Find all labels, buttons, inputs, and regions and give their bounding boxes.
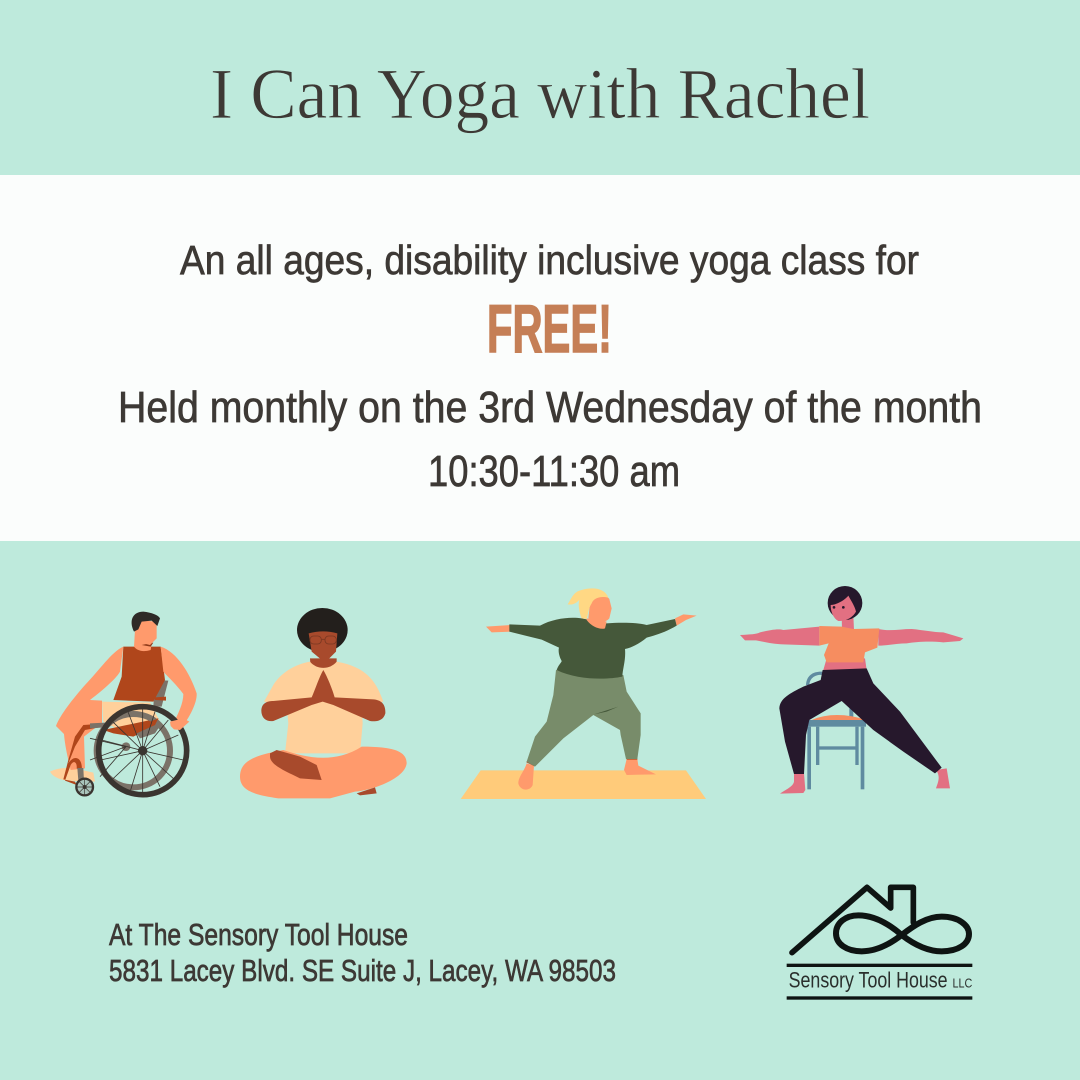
- icon: woman in warrior pose with chair: [740, 586, 963, 794]
- icon: meditating person: [240, 608, 407, 798]
- text: class description: An all ages, disability inclusive yoga class for: [180, 237, 919, 283]
- logo: Sensory Tool House: [787, 887, 973, 1000]
- text: schedule: Held monthly on the 3rd Wednesday of the month: [118, 383, 982, 432]
- panel: class details: [0, 175, 1080, 541]
- text: free: FREE!: [487, 291, 612, 367]
- icon: woman in warrior pose on mat: [461, 588, 706, 799]
- text: location: 5831 Lacey Blvd. SE Suite J, Lacey, WA 98503: [109, 953, 616, 988]
- yoga mat: [461, 770, 706, 799]
- logo wordmark: Sensory Tool House LLC: [789, 967, 973, 992]
- title: I Can Yoga with Rachel: [210, 54, 870, 134]
- chair: [806, 672, 866, 789]
- icon: man in wheelchair: [50, 612, 197, 795]
- text: location: At The Sensory Tool House: [109, 917, 408, 952]
- text: location: [109, 917, 616, 988]
- text: time: 10:30-11:30 am: [428, 447, 680, 496]
